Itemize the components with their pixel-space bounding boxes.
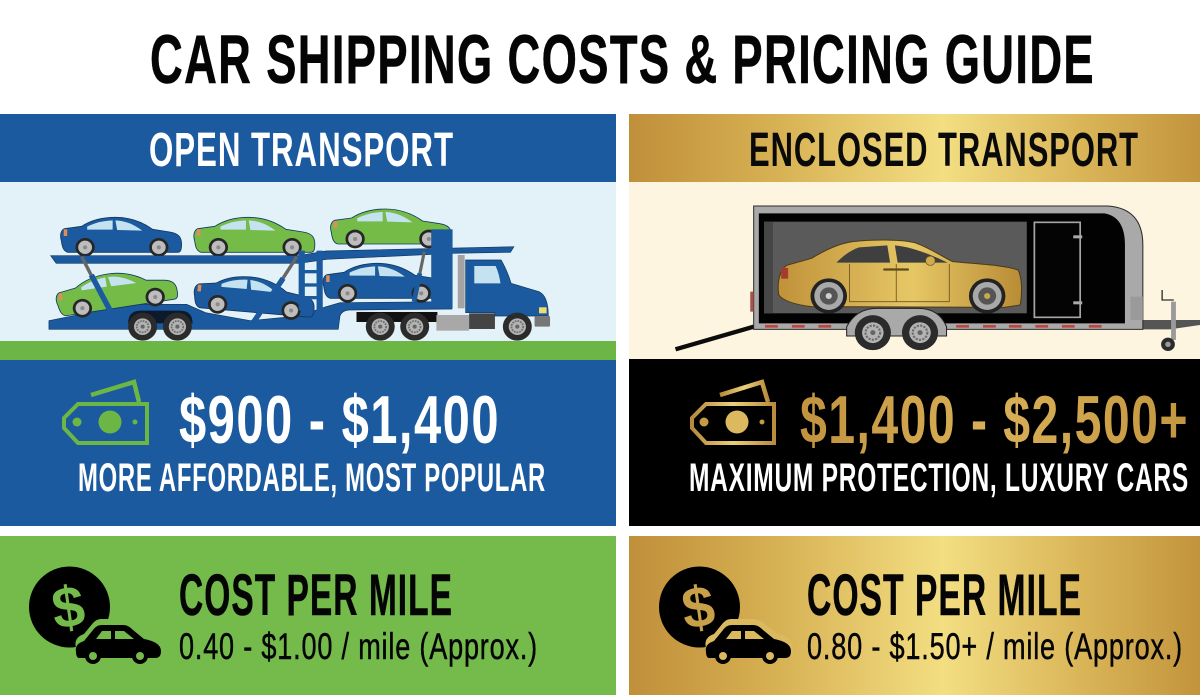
open transport illustration background — [0, 182, 616, 360]
trailer fender and wheels — [847, 308, 947, 350]
icon: gold banknote — [692, 382, 774, 443]
cars on lower deck — [53, 263, 444, 322]
tagline: MORE AFFORDABLE, MOST POPULAR — [78, 456, 546, 500]
icon: dollar coin and car: $ — [48, 573, 90, 642]
icon: car carrier truck with six cars — [49, 209, 550, 341]
truck chassis — [356, 255, 495, 331]
trailer body — [750, 206, 1143, 329]
panel: enclosed transport column — [629, 114, 1200, 695]
panel: open transport column — [0, 114, 616, 695]
open transport header — [0, 114, 616, 182]
price: $900 - $1,400 — [179, 382, 500, 458]
price block: open transport — [0, 360, 616, 526]
lower deck frame — [49, 302, 452, 329]
enclosed transport illustration background — [629, 182, 1200, 359]
ramp — [675, 327, 754, 349]
enclosed transport header — [629, 114, 1200, 182]
open transport header: OPEN TRANSPORT — [149, 124, 454, 177]
price block: enclosed transport — [629, 359, 1200, 526]
icon: green banknote — [64, 382, 147, 443]
rate: 0.40 - $1.00 / mile (Approx.) — [179, 626, 538, 667]
support struts and ladder — [82, 229, 453, 325]
icon: enclosed trailer with gold car — [675, 206, 1200, 351]
truck and trailer wheels — [128, 313, 532, 341]
cost per mile: open transport — [0, 536, 616, 695]
cars on upper deck — [61, 209, 452, 257]
cost per mile: enclosed transport — [629, 536, 1200, 695]
icon: dollar coin and car — [659, 566, 793, 664]
truck cab — [466, 260, 550, 327]
icon: dollar coin and car — [29, 566, 163, 664]
upper deck — [51, 247, 514, 263]
wheel wells — [128, 311, 193, 323]
icon: dollar coin and car: $ — [678, 573, 720, 642]
gold luxury car — [778, 240, 1022, 314]
heading: COST PER MILE — [179, 563, 453, 628]
trailer door — [1034, 222, 1082, 317]
hitch and jack — [1143, 290, 1200, 351]
red marker lights — [765, 325, 1102, 328]
